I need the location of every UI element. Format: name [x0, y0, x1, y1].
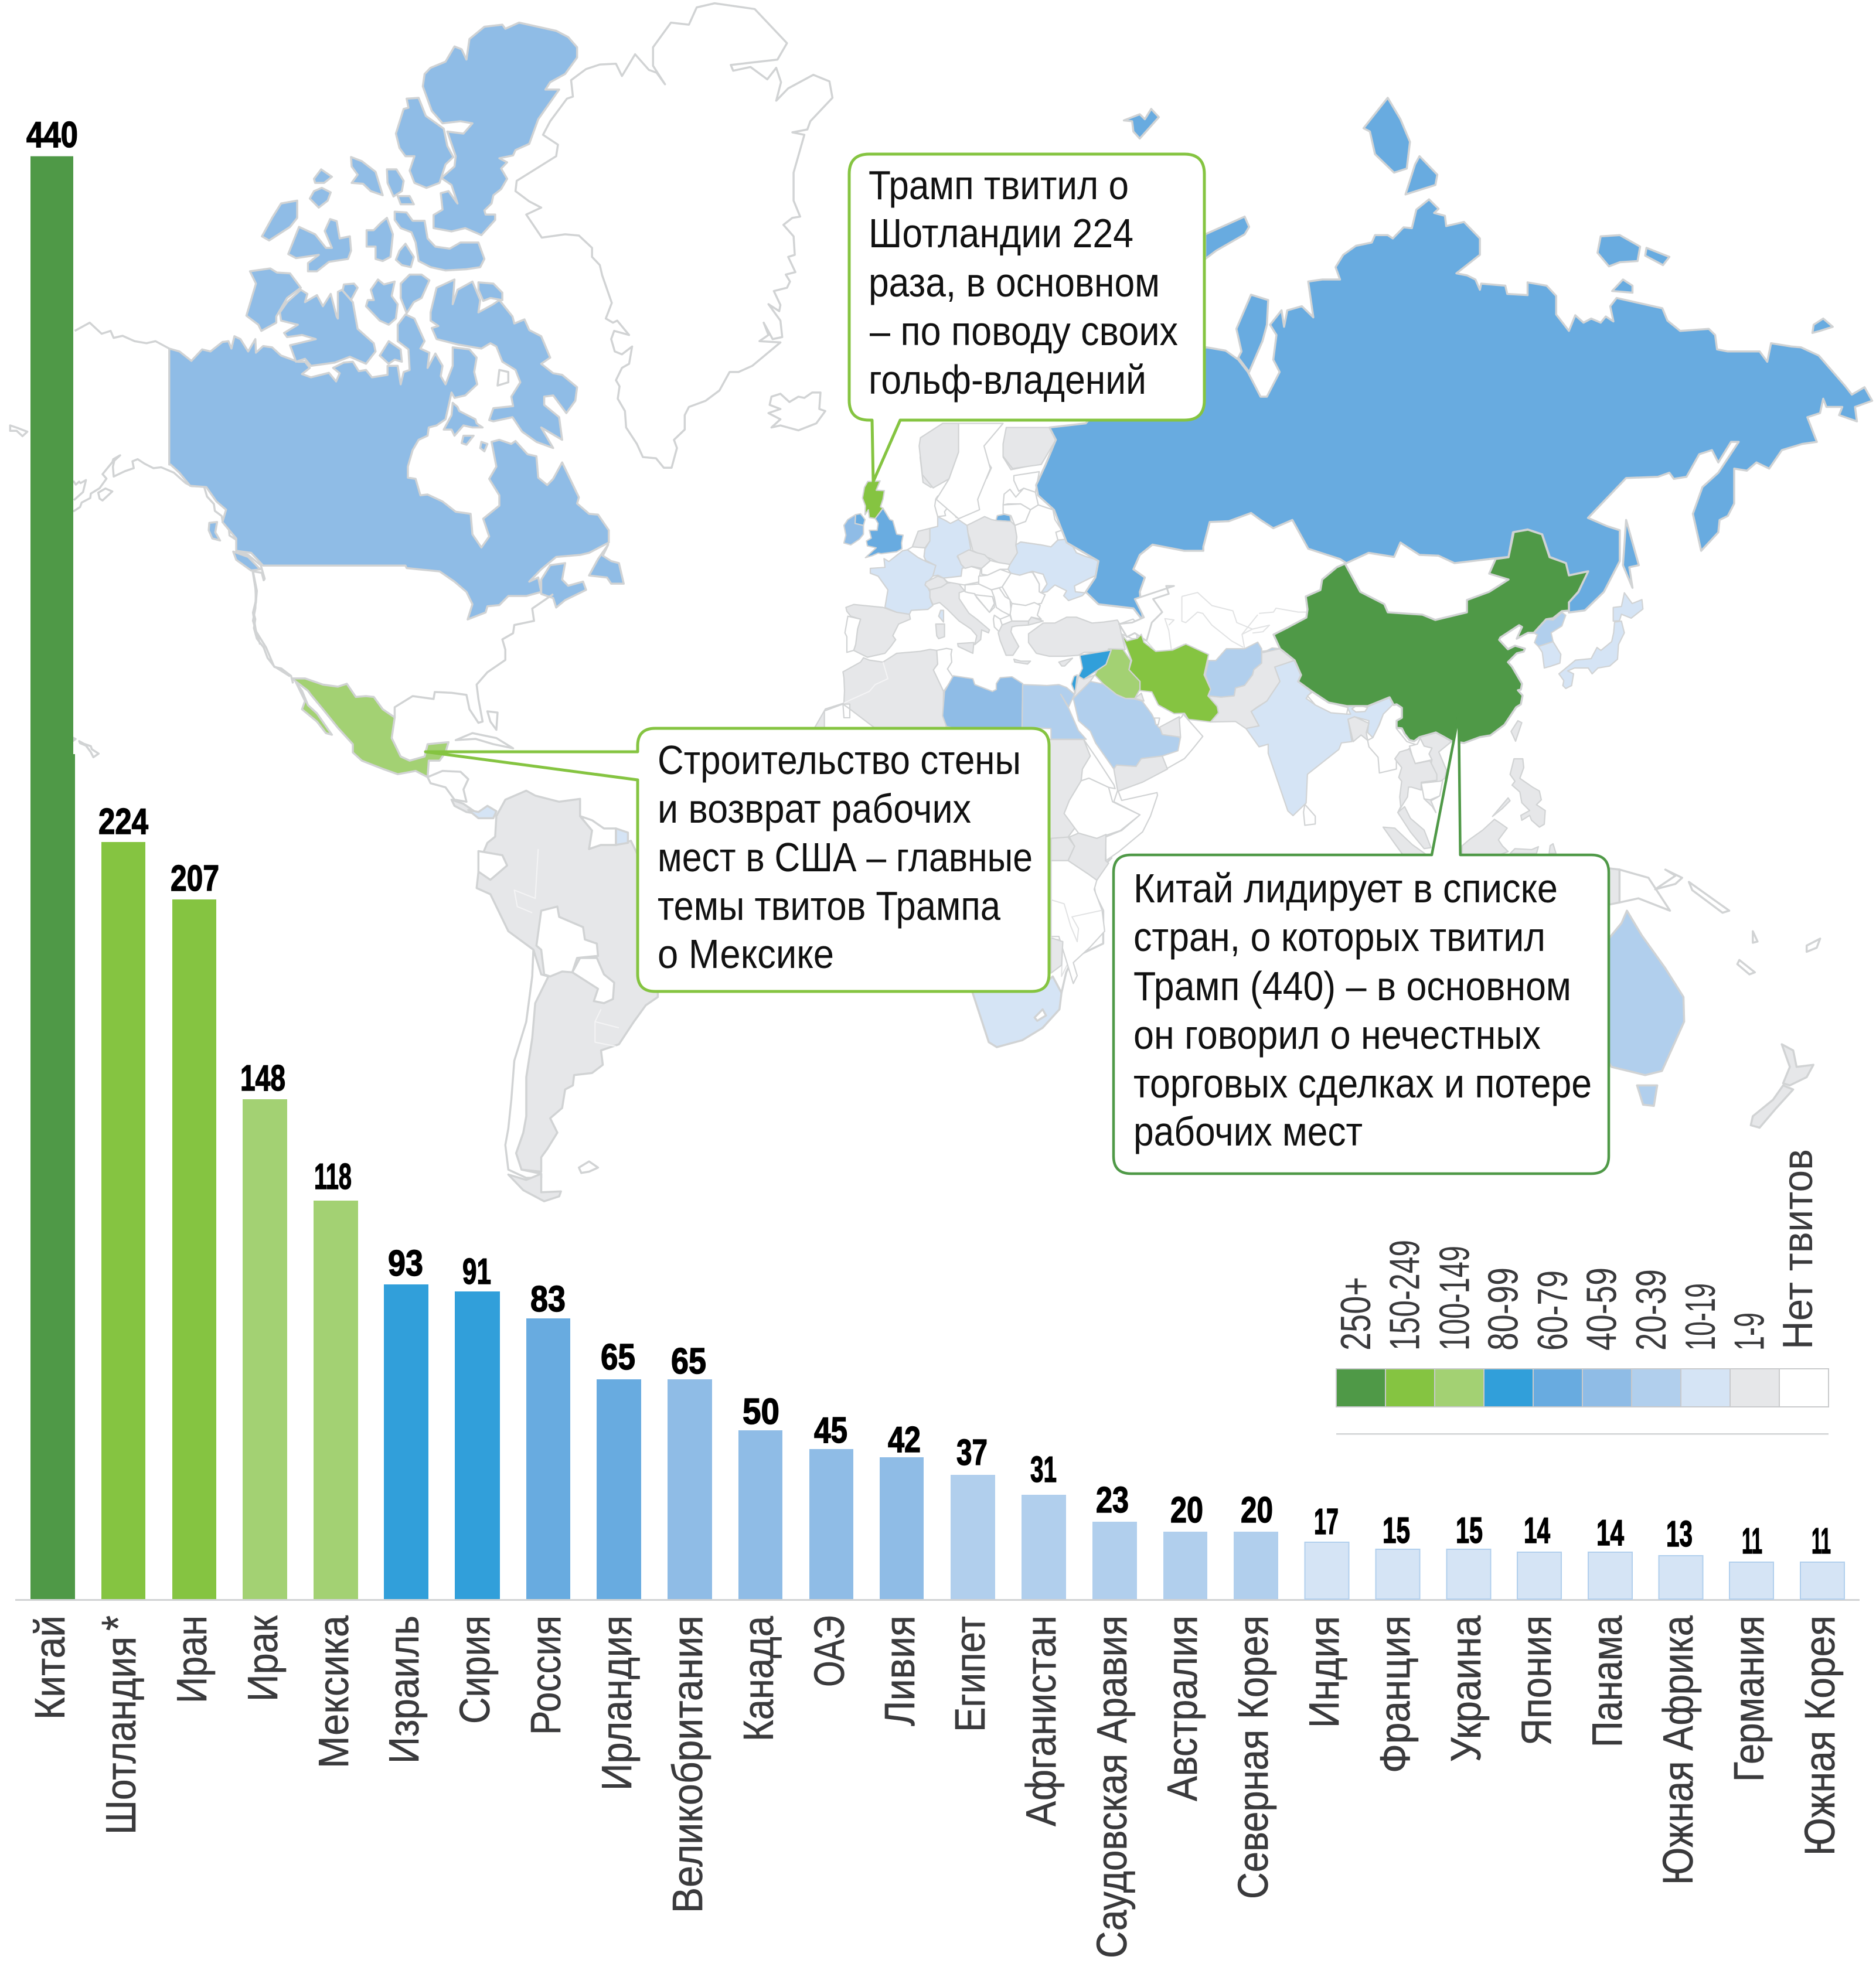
bar: Канада 50: Канада [736, 1615, 782, 1741]
legend labels: 60-79 [1530, 1270, 1577, 1351]
map: Norway, Sweden and Finland north [919, 424, 1056, 519]
bar: Ирландия 65: 65 [601, 1337, 635, 1378]
map: USA coast, Mexico, Central America and South America [253, 586, 658, 1201]
bar: Южная Корея 11: Южная Корея [1797, 1615, 1844, 1856]
bar: Россия 83 [523, 1279, 570, 1735]
bar: Ливия 42: Ливия [877, 1615, 924, 1726]
bar: Ирландия 65 [594, 1337, 641, 1791]
callout: China: торговых сделках и потере [1133, 1061, 1592, 1106]
legend labels [1333, 1149, 1821, 1351]
bar: Украина 15: 15 [1456, 1511, 1483, 1551]
legend labels: Нет твитов [1775, 1149, 1821, 1349]
bar: Египет 37: Египет [947, 1616, 994, 1732]
callout: China: Китай лидирует в списке [1133, 865, 1558, 911]
bar: Россия 83: Россия [523, 1615, 570, 1735]
bar: Панама 14: 14 [1596, 1513, 1624, 1553]
bar: Ирак 148 [240, 1058, 287, 1702]
bar: Украина 15: Украина [1443, 1615, 1490, 1762]
bar: Иран 207 [169, 858, 219, 1703]
bar: ОАЭ 45: 45 [814, 1410, 847, 1451]
legend labels: 40-59 [1579, 1267, 1626, 1351]
bar: Австралия 20 [1159, 1490, 1207, 1801]
callout: China: Трамп (440) – в основном [1133, 963, 1571, 1009]
bar: Германия 11: 11 [1742, 1521, 1762, 1562]
bar: Китай 440 [26, 115, 78, 1720]
legend [1333, 1149, 1829, 1434]
bar: Шотландия 224: Шотландия [98, 1637, 145, 1835]
legend labels: 250+ [1333, 1277, 1380, 1351]
map: Russia [1036, 98, 1872, 621]
bar: Панама 14: Панама [1584, 1615, 1631, 1747]
bar: Саудовская Аравия 23: Саудовская Аравия [1089, 1615, 1136, 1958]
bar: Иран 207: Иран [169, 1615, 216, 1703]
map: southern Africa, Australia, New Guinea and New Zealand [972, 857, 1820, 1128]
bar: Германия 11: Германия [1726, 1615, 1773, 1782]
bar: Израиль 93: Израиль [381, 1615, 428, 1764]
legend labels: 150-249 [1382, 1240, 1429, 1351]
bar: Ливия 42 [877, 1420, 924, 1726]
bar: Шотландия 224 [92, 802, 148, 1835]
bar: Россия 83: 83 [530, 1279, 566, 1320]
bar: Австралия 20: Австралия [1159, 1615, 1206, 1801]
bar: Мексика 118 [311, 1157, 358, 1768]
map: Middle East, East Africa and South Asia [1043, 586, 1415, 984]
bar: Украина 15 [1443, 1511, 1491, 1762]
callout: China: рабочих мест [1133, 1109, 1363, 1154]
callout: Mexico: и возврат рабочих [658, 786, 971, 831]
map: Canada [75, 23, 624, 645]
bar: Израиль 93 [381, 1243, 428, 1764]
bar: ОАЭ 45: ОАЭ [806, 1615, 853, 1687]
bar: Великобритания 65 [665, 1341, 712, 1913]
bar: ОАЭ 45 [806, 1410, 853, 1687]
bar: Шотландия 224: 224 [98, 802, 148, 842]
legend labels: 100-149 [1431, 1246, 1478, 1351]
bar: Сирия 91: Сирия [452, 1615, 499, 1724]
bar: Франция 15: 15 [1383, 1511, 1410, 1551]
bar: Шотландия 224: * [92, 1615, 144, 1631]
bar: Мексика 118: Мексика [311, 1615, 358, 1768]
bar: Австралия 20: 20 [1170, 1490, 1203, 1531]
callout: China: он говорил о нечестных [1133, 1012, 1541, 1058]
callout: Mexico: мест в США – главные [658, 834, 1033, 880]
bar: Северная Корея 20: 20 [1241, 1490, 1273, 1531]
bar: Ирландия 65: Ирландия [594, 1615, 641, 1791]
world map [10, 4, 1872, 1201]
bar: Канада 50 [736, 1392, 782, 1741]
callout: Mexico: о Мексике [658, 931, 834, 977]
bar: Китай 440: Китай [27, 1615, 74, 1720]
legend labels: 20-39 [1628, 1269, 1675, 1351]
bar: Великобритания 65: 65 [671, 1341, 706, 1382]
legend labels: 80-99 [1480, 1267, 1527, 1351]
callout: China [1114, 715, 1609, 1174]
bar: Северная Корея 20: Северная Корея [1230, 1615, 1277, 1899]
bar: Афганистан 31: 31 [1030, 1450, 1057, 1490]
callout: Scotland: Шотландии 224 [869, 210, 1133, 256]
map: Europe and North Africa [815, 457, 1137, 739]
map: South-East Asia, Korea and Japan [1383, 593, 1643, 854]
callout: Mexico [425, 728, 1049, 991]
bar: Ирак 148: 148 [240, 1058, 285, 1099]
bar: Сирия 91 [452, 1252, 500, 1724]
bar: Франция 15: Франция [1372, 1615, 1419, 1773]
callout: China: стран, о которых твитил [1133, 914, 1545, 960]
callout: Scotland: Трамп твитил о [869, 162, 1129, 208]
bar: Япония 14 [1513, 1511, 1561, 1746]
callout: Scotland: – по поводу своих [870, 308, 1178, 354]
bar: Панама 14 [1584, 1513, 1632, 1747]
callout: Mexico: Строительство стены [658, 737, 1021, 783]
bar: Афганистан 31 [1018, 1450, 1066, 1826]
bar: Мексика 118: 118 [314, 1157, 352, 1197]
bar: Сирия 91: 91 [462, 1252, 491, 1292]
bar: Индия 17 [1301, 1502, 1349, 1728]
callout: Scotland: гольф-владений [869, 357, 1146, 403]
bar: Канада 50: 50 [743, 1392, 779, 1432]
chart axis baseline [15, 1599, 1860, 1601]
bar: Израиль 93: 93 [388, 1243, 423, 1284]
map: Greenland and Iceland [516, 4, 832, 468]
callout: Scotland [849, 154, 1204, 482]
legend labels: 10-19 [1677, 1283, 1724, 1351]
legend colour swatches [1336, 1369, 1829, 1407]
bar: Саудовская Аравия 23: 23 [1096, 1480, 1129, 1521]
bar: Египет 37 [947, 1433, 995, 1732]
bar: Япония 14: Япония [1513, 1615, 1560, 1746]
bar: Франция 15 [1372, 1511, 1419, 1773]
bar: Афганистан 31: Афганистан [1018, 1615, 1065, 1826]
bar: Индия 17: 17 [1314, 1502, 1339, 1542]
map: Alaska and USA west coast [10, 425, 293, 757]
bar: Южная Корея 11: 11 [1812, 1521, 1831, 1562]
bar: Ливия 42: 42 [888, 1420, 921, 1460]
callout: Scotland: раза, в основном [869, 260, 1160, 305]
bar: Южная Африка 13: 13 [1666, 1514, 1693, 1555]
legend labels: 1-9 [1727, 1313, 1773, 1351]
map: China [1274, 530, 1588, 743]
bar: Иран 207: 207 [171, 858, 219, 899]
bar: Египет 37: 37 [956, 1433, 988, 1473]
bar: Индия 17: Индия [1301, 1616, 1348, 1728]
bar: Великобритания 65: Великобритания [665, 1615, 711, 1913]
bar: Китай 440: 440 [26, 115, 78, 155]
bar: Япония 14: 14 [1524, 1511, 1550, 1551]
bar: Ирак 148: Ирак [240, 1615, 287, 1702]
callout: Mexico: темы твитов Трампа [658, 883, 1000, 929]
bar: Южная Африка 13: Южная Африка [1655, 1615, 1702, 1885]
